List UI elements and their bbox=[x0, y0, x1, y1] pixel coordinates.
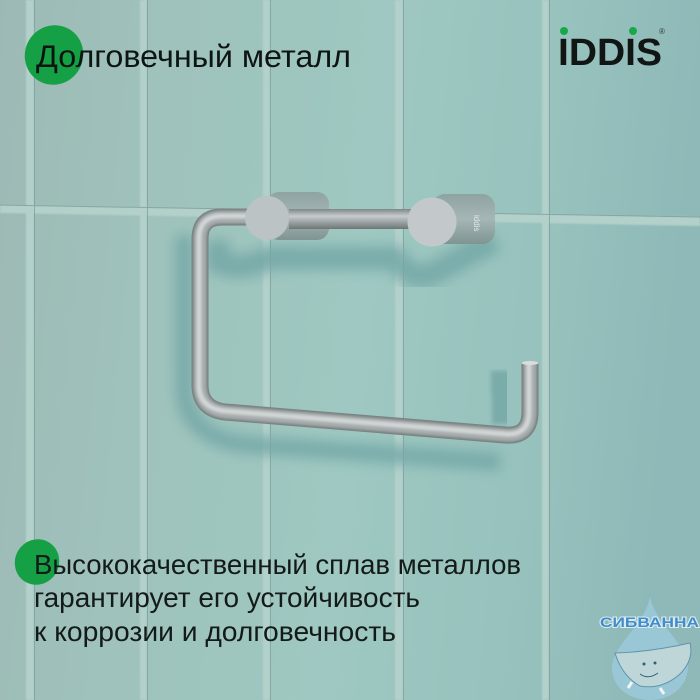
bathtub bbox=[615, 643, 691, 687]
heading: Долговечный металл bbox=[36, 38, 351, 74]
left knob bbox=[245, 196, 289, 240]
logo: IDDIS: IDDIS bbox=[558, 32, 662, 74]
description text: к коррозии и долговечность bbox=[34, 616, 396, 647]
brand mark on cylinder: iddis bbox=[472, 215, 481, 231]
description text: Высококачественный сплав металлов bbox=[34, 549, 521, 580]
watermark name: СИБВАННА bbox=[600, 614, 699, 630]
rear cylinder left bbox=[267, 192, 329, 240]
registered mark: ® bbox=[659, 27, 665, 36]
crossbar bbox=[289, 209, 411, 229]
bathtub face bbox=[640, 662, 658, 677]
bathtub feet bbox=[628, 682, 664, 694]
water drop bbox=[612, 597, 688, 700]
logo dots bbox=[560, 27, 637, 35]
toilet paper holder bbox=[199, 192, 538, 435]
description text: гарантирует его устойчивость bbox=[34, 582, 420, 613]
tube bbox=[200, 217, 530, 435]
watermark: Сибванна bbox=[600, 597, 699, 700]
heading badge bbox=[14, 15, 94, 95]
description badge bbox=[6, 531, 68, 593]
rear cylinder right bbox=[432, 194, 495, 244]
description text bbox=[34, 549, 521, 647]
tube end bbox=[522, 361, 538, 365]
holder shadow bbox=[184, 235, 503, 462]
right knob bbox=[408, 198, 456, 246]
